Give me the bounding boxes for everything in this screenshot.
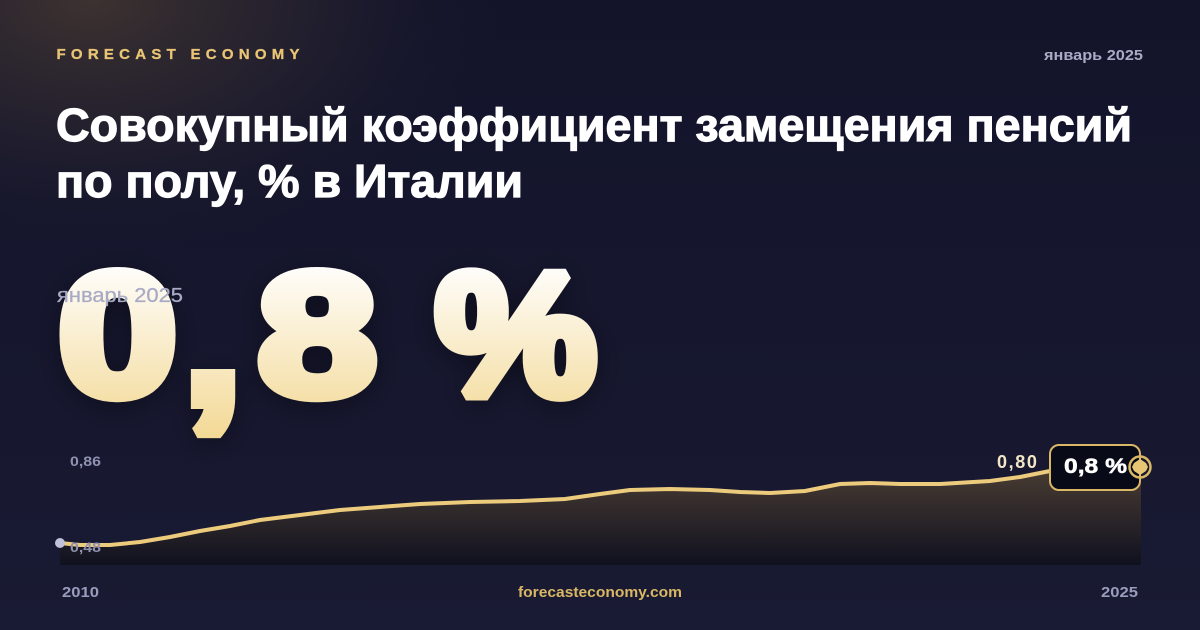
x axis end: 2025: [1101, 584, 1138, 601]
y axis max: 0,86: [70, 453, 101, 469]
start point: [55, 538, 65, 548]
end marker: [1130, 456, 1150, 478]
big value: ,: [183, 233, 243, 443]
chart line: [60, 471, 1050, 545]
chart area: [60, 467, 1141, 565]
big value: %: [435, 237, 596, 432]
title: Совокупный коэффициент замещения пенсий: [56, 99, 1132, 151]
source: forecasteconomy.com: [518, 584, 682, 601]
date subtitle overlapping value: январь 2025: [57, 285, 183, 307]
brand label: FORECAST ECONOMY: [56, 46, 300, 63]
date top right: январь 2025: [1044, 47, 1143, 64]
last value label: 0,80: [997, 452, 1038, 472]
y axis min: 0,48: [70, 539, 101, 555]
title: по полу, % в Италии: [56, 155, 523, 207]
callout: 0,8 %: [1064, 455, 1127, 478]
big value: 8: [258, 238, 377, 432]
title: [56, 99, 1132, 207]
big value: [58, 233, 596, 443]
big value: 0: [58, 238, 177, 432]
x axis start: 2010: [62, 584, 99, 601]
callout: [1050, 445, 1140, 490]
line chart: [55, 445, 1150, 565]
